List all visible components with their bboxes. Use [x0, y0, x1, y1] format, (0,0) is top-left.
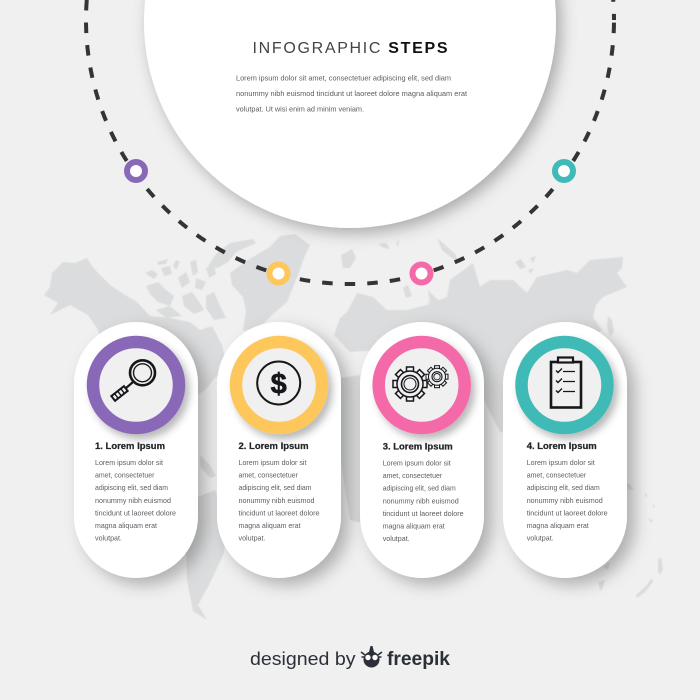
text: step 2: Lorem ipsum dolor sit — [238, 458, 307, 467]
text: step 1: tincidunt ut laoreet dolore — [95, 508, 176, 517]
map: asia — [400, 257, 627, 440]
text: step 3: tincidunt ut laoreet dolore — [383, 509, 464, 518]
world map — [44, 234, 663, 620]
wordmark: freepik — [387, 649, 450, 670]
map: arctic islands — [145, 259, 226, 320]
footer credit — [250, 646, 450, 670]
text: step 3: nonummy nibh euismod — [383, 496, 459, 505]
marker: teal — [555, 162, 573, 180]
text: step 4 — [527, 458, 608, 542]
icon: freepik logo — [361, 646, 382, 668]
text: step 1: volutpat. — [95, 533, 122, 542]
text: step 2: tincidunt ut laoreet dolore — [238, 508, 320, 517]
marker: purple — [127, 162, 145, 180]
intro text: Lorem ipsum dolor sit amet, consectetuer adipiscing elit, sed diam — [236, 74, 451, 82]
text: step 1: adipiscing elit, sed diam — [95, 483, 168, 492]
map: japan — [607, 316, 614, 336]
text: step 3: adipiscing elit, sed diam — [383, 484, 456, 492]
heading: step 4: 4. Lorem Ipsum — [527, 441, 597, 452]
map: iceland and arctic islets — [341, 238, 460, 268]
icon part: large gear — [393, 367, 427, 401]
map: siberian islands — [515, 256, 536, 274]
header circle panel — [144, 0, 556, 228]
heading: step 2: 2. Lorem Ipsum — [238, 441, 308, 452]
text: step 1: amet, consectetuer — [95, 470, 155, 480]
map: south america — [186, 490, 228, 620]
panel: step 2 — [217, 322, 341, 578]
footer credit: designed by — [250, 649, 356, 669]
text: step 3: Lorem ipsum dolor sit — [383, 458, 452, 468]
heading: step 3: 3. Lorem Ipsum — [383, 442, 453, 452]
map: north america — [44, 258, 228, 420]
text: step 4: adipiscing elit, sed diam — [527, 483, 600, 492]
heading: step 1: 1. Lorem Ipsum — [95, 441, 165, 452]
text: step 4: nonummy nibh euismod — [527, 496, 603, 505]
ring: yellow — [236, 342, 322, 428]
panel: step 4 — [503, 322, 627, 578]
text: step 2: magna aliquam erat — [238, 521, 301, 530]
text: step 4: tincidunt ut laoreet dolore — [527, 508, 608, 517]
route markers — [127, 162, 573, 282]
panel: step 3 — [360, 322, 484, 578]
text: step 3 — [383, 458, 464, 543]
text: step 1: Lorem ipsum dolor sit — [95, 458, 164, 467]
marker: yellow — [270, 264, 288, 282]
map: scandinavia islands — [403, 285, 447, 318]
ring: purple — [93, 342, 179, 428]
map: greenland — [230, 234, 310, 331]
text: step 2: nonummy nibh euismod — [238, 496, 314, 505]
dashed route arc — [86, 0, 614, 284]
icon: clipboard checklist — [551, 358, 581, 408]
intro text — [236, 74, 467, 114]
text: step 4: Lorem ipsum dolor sit — [527, 458, 596, 467]
text: step 3: amet, consectetuer — [383, 471, 443, 480]
icon: gears — [393, 366, 448, 401]
text: step 2: amet, consectetuer — [238, 470, 298, 480]
text: step 4: amet, consectetuer — [527, 470, 587, 480]
ring: teal — [522, 342, 608, 428]
title: INFOGRAPHIC STEPS — [252, 40, 448, 57]
text: step 2: volutpat. — [238, 533, 266, 542]
text: step 1: nonummy nibh euismod — [95, 496, 171, 505]
map: europe — [334, 293, 414, 352]
marker: pink — [412, 264, 430, 282]
map: southeast islands and australia — [598, 483, 663, 598]
text: step 3: magna aliquam erat — [383, 521, 446, 530]
map: ellesmere — [208, 239, 256, 268]
intro text: nonummy nibh euismod tincidunt ut laoreet dolore magna aliquam erat — [236, 89, 467, 98]
intro text: volutpat. Ut wisi enim ad minim veniam. — [236, 104, 364, 114]
text: step 2 — [238, 458, 320, 542]
icon: magnifying glass — [111, 360, 155, 401]
text: step 4: magna aliquam erat — [527, 521, 590, 530]
icon part: small gear — [426, 366, 448, 388]
text: step 1: magna aliquam erat — [95, 521, 158, 530]
map: central america — [200, 455, 216, 478]
text: step 2: adipiscing elit, sed diam — [238, 483, 312, 492]
icon: dollar coin — [257, 362, 300, 404]
icon: dollar coin: $ — [271, 368, 287, 400]
ring: pink — [379, 342, 465, 428]
map: africa — [335, 372, 400, 525]
panel: step 1 — [74, 322, 198, 578]
text: step 1 — [95, 458, 176, 542]
text: step 4: volutpat. — [527, 533, 554, 542]
text: step 3: volutpat. — [383, 534, 410, 543]
